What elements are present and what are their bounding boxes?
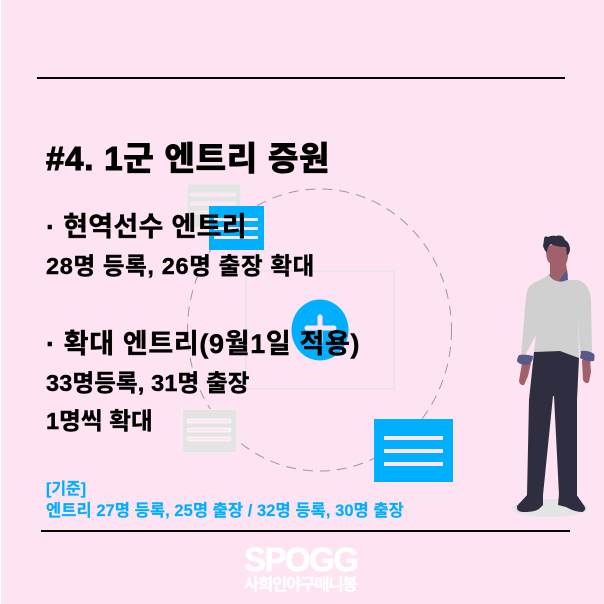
footnote: baseline numbers	[46, 480, 404, 520]
shoes	[517, 494, 585, 512]
logo: SPOGG	[244, 541, 358, 594]
bottom rule	[41, 530, 570, 532]
detail: current players: 28명 등록, 26명 출장 확대	[46, 253, 315, 279]
center frame	[246, 271, 394, 389]
collar	[547, 270, 568, 284]
logo subtitle: 사회인야구매니봉	[244, 576, 357, 594]
grey card bottom	[182, 410, 236, 452]
heading: current players entry: · 현역선수 엔트리	[46, 212, 247, 242]
neck and face	[546, 244, 568, 285]
footnote text: 엔트리 27명 등록, 25명 출장 / 32명 등록, 30명 출장	[46, 502, 404, 520]
detail: one more each: 1명씩 확대	[46, 408, 153, 434]
title: #4. 1군 엔트리 증원	[46, 140, 330, 177]
text block: current players	[46, 212, 315, 279]
hands	[519, 358, 591, 385]
sweater	[521, 275, 592, 358]
plus badge	[292, 300, 348, 360]
trousers	[527, 351, 579, 495]
heading: expanded entry: · 확대 엔트리(9월1일 적용)	[46, 329, 360, 359]
cuffs	[517, 351, 594, 365]
text block: expanded entry	[46, 329, 360, 434]
blue card top	[209, 206, 264, 250]
dashed orbit	[188, 189, 452, 471]
ground shadow	[512, 499, 588, 517]
hair	[543, 236, 570, 255]
blue card bottom	[374, 419, 453, 482]
top rule	[37, 77, 565, 79]
grey card top	[187, 184, 241, 228]
footnote label: [기준]	[46, 481, 86, 498]
logo wordmark: SPOGG	[244, 541, 358, 578]
detail: expanded registration: 33명등록, 31명 출장	[46, 370, 250, 396]
